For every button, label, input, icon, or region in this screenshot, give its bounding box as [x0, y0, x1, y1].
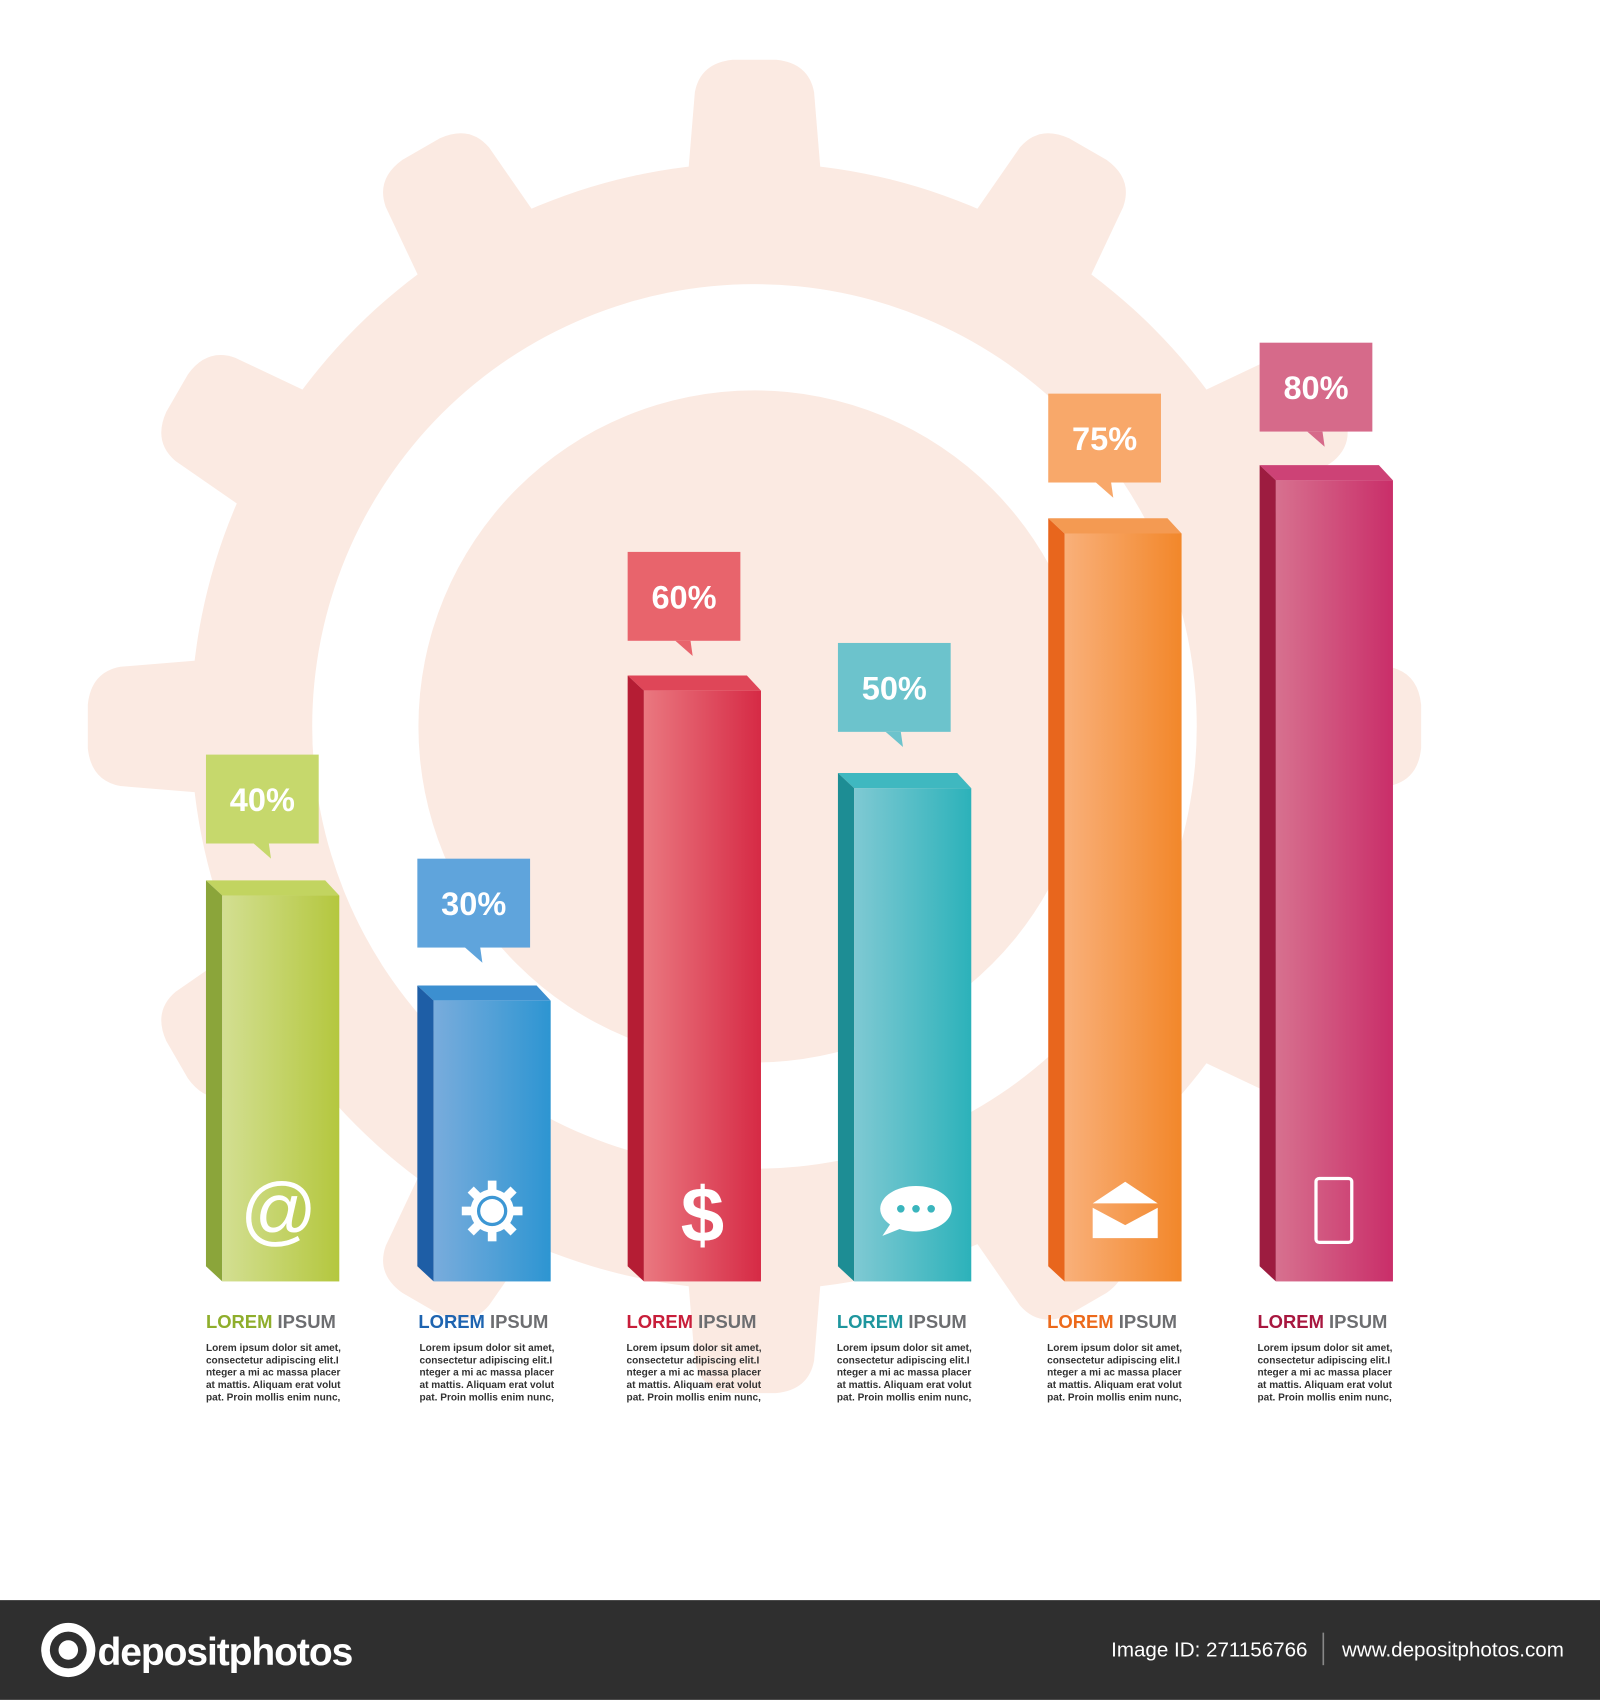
footer bar: www.depositphotos.com [1341, 1639, 1564, 1662]
labels: LOREM IPSUM [418, 1311, 548, 1332]
bar: red 60%: $ [681, 1170, 724, 1258]
labels [206, 1311, 1393, 1404]
labels: nteger a mi ac massa placer [206, 1368, 340, 1379]
bar: blue 30% [417, 859, 551, 1281]
background gear [88, 60, 1421, 1393]
labels: LOREM IPSUM [1047, 1311, 1177, 1332]
footer bar: Image ID: 271156766 [1111, 1639, 1308, 1662]
labels: LOREM IPSUM [206, 1311, 336, 1332]
labels: LOREM IPSUM [837, 1311, 967, 1332]
footer bar [0, 1600, 1600, 1700]
labels: LOREM IPSUM [1257, 1311, 1387, 1332]
bar: green 40%: @ [240, 1168, 317, 1253]
bar: magenta 80%: 80% [1283, 370, 1349, 406]
bar: red 60%: 60% [651, 579, 717, 615]
labels: consectetur adipiscing elit.I [206, 1355, 339, 1366]
bar: teal 50%: 50% [862, 670, 927, 706]
bar: red 60% [628, 552, 761, 1281]
labels: pat. Proin mollis enim nunc, [206, 1393, 341, 1404]
labels: LOREM IPSUM [627, 1311, 756, 1332]
bar: teal 50% [838, 643, 971, 1281]
bar: green 40%: 40% [230, 782, 295, 818]
labels: Lorem ipsum dolor sit amet, [206, 1343, 341, 1354]
bar: magenta 80% [1260, 343, 1393, 1281]
labels: at mattis. Aliquam erat volut [206, 1380, 341, 1391]
bar: blue 30%: 30% [441, 886, 506, 922]
footer bar: depositphotos [98, 1631, 353, 1674]
bar: orange 75%: 75% [1072, 421, 1137, 457]
bar: orange 75% [1048, 394, 1182, 1281]
bar: green 40% [206, 755, 339, 1281]
